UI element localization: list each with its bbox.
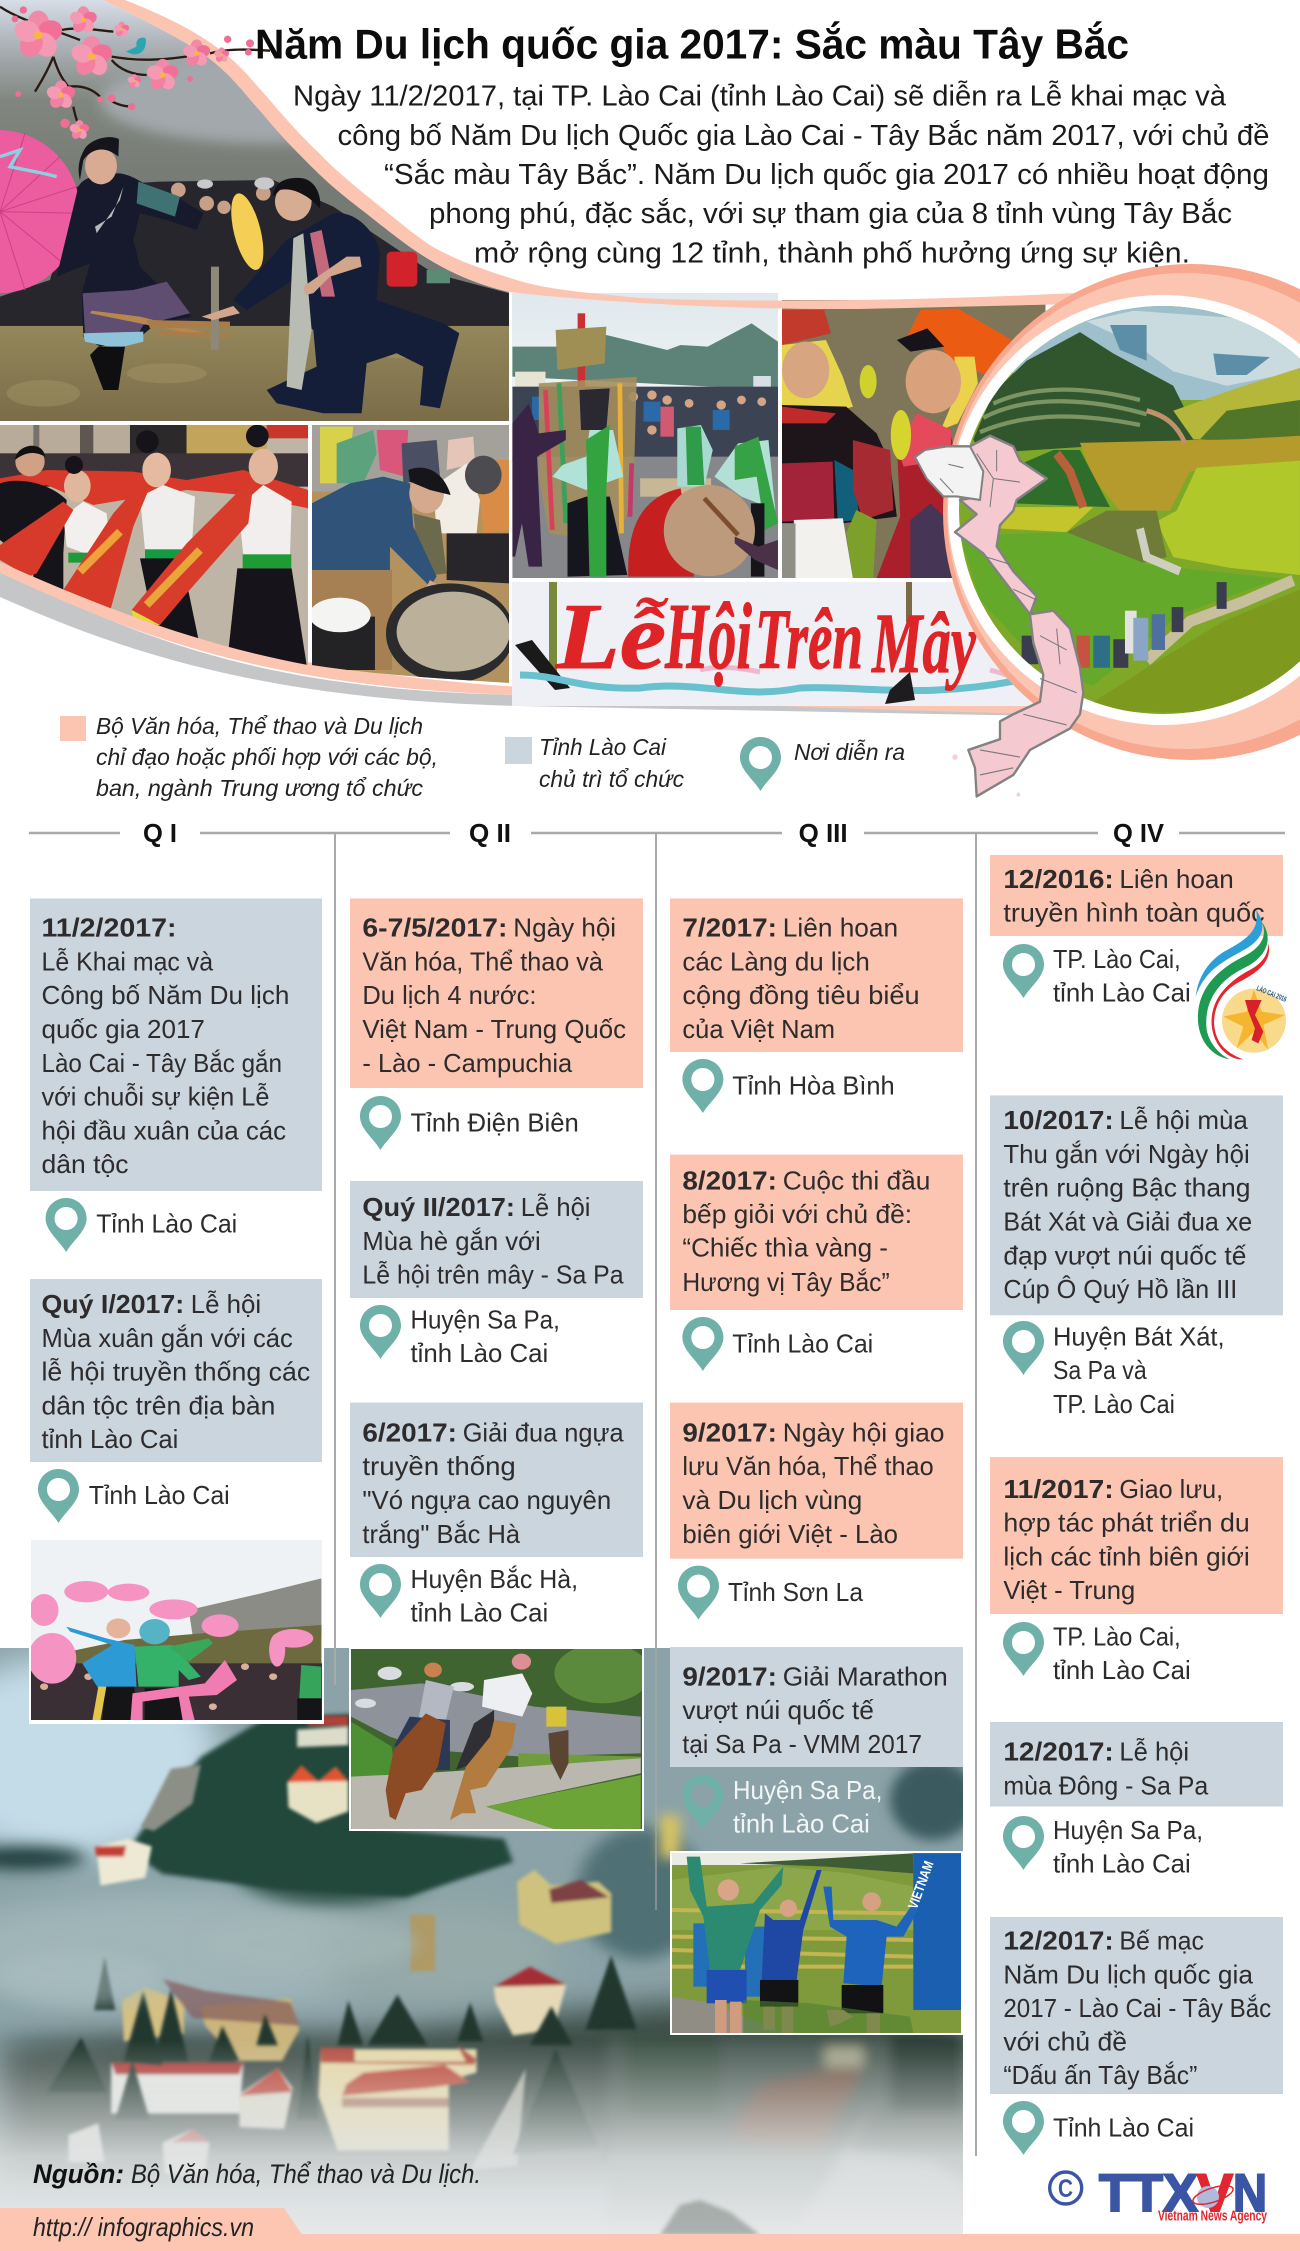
card: horse race [350, 1403, 643, 1557]
card: marathon: Giải Marathon [783, 1662, 948, 1692]
heading: Q I [143, 818, 177, 848]
circle photo frame rings [943, 264, 1300, 760]
location [360, 1564, 578, 1628]
card: television festival: Liên hoan [1119, 864, 1234, 894]
intro paragraph: “Sắc màu Tây Bắc”. Năm Du lịch quốc gia 2017 có nhiều hoạt động [384, 158, 1269, 191]
card: closing ceremony [990, 1917, 1283, 2094]
location [360, 1096, 579, 1150]
location: Tỉnh Hòa Bình [732, 1070, 895, 1100]
card: border cooperation: Việt - Trung [1003, 1575, 1135, 1605]
card: closing ceremony: 2017 - Lào Cai - Tây Bắc [1003, 1993, 1271, 2023]
card: autumn festival: Cúp Ô Quý Hồ lần III [1003, 1274, 1237, 1304]
card: border cooperation: lịch các tỉnh biên giới [1003, 1541, 1250, 1571]
card: cooking contest [670, 1155, 963, 1310]
location [38, 1469, 230, 1523]
card: horse race: 6/2017: [362, 1417, 457, 1447]
photo: two smiling Lo Lo women [782, 300, 1045, 580]
panel: Q I [30, 818, 322, 1523]
card: opening ceremony: hội đầu xuân của các [42, 1115, 286, 1145]
card: Vietnam-Laos border festival [670, 1403, 963, 1559]
card: Vietnam-Laos border festival: và Du lịch vùng [682, 1485, 862, 1515]
location: Tỉnh Sơn La [728, 1577, 864, 1607]
location: tỉnh Lào Cai [733, 1808, 870, 1838]
card: cooking contest: Hương vị Tây Bắc” [682, 1267, 890, 1297]
card: winter festival: Lễ hội [1119, 1736, 1189, 1766]
cherry blossom branch with bird [0, 6, 270, 141]
card: spring festival: Mùa xuân gắn với các [42, 1323, 293, 1353]
card: four nations festival [350, 898, 643, 1088]
hand-painted festival lettering [554, 597, 976, 691]
card: autumn festival: trên ruộng Bậc thang [1003, 1172, 1250, 1202]
legend item: province: chủ trì tổ chức [539, 766, 684, 792]
card: closing ceremony: “Dấu ấn Tây Bắc” [1003, 2060, 1197, 2090]
card: television festival [990, 855, 1283, 936]
location: Tỉnh Lào Cai [89, 1480, 230, 1510]
photo: cooking at the big wok [309, 420, 514, 687]
card: autumn festival [990, 1095, 1283, 1315]
card: spring festival: Quý I/2017: [42, 1289, 184, 1319]
card: winter festival: mùa Đông - Sa Pa [1003, 1770, 1209, 1800]
location: tỉnh Lào Cai [1053, 1848, 1191, 1878]
card: village tourism festival: Liên hoan [783, 913, 898, 943]
location: TP. Lào Cai, [1053, 944, 1181, 974]
card: television festival: truyền hình toàn quốc [1003, 897, 1265, 927]
card: summer festival: Mùa hè gắn với [362, 1226, 541, 1256]
legend item: province [505, 734, 684, 792]
card: opening ceremony: Công bố Năm Du lịch [42, 980, 289, 1010]
photo: Hmong dancers in the field [0, 0, 509, 423]
logo: Lào Cai 2016 television festival [1196, 910, 1288, 1059]
panel: Q IV [990, 818, 1288, 2155]
card: closing ceremony: Năm Du lịch quốc gia [1003, 1960, 1254, 1990]
card: Vietnam-Laos border festival: Ngày hội giao [783, 1417, 944, 1447]
footer bar [0, 2234, 1300, 2251]
card: summer festival: Lễ hội trên mây - Sa Pa [362, 1260, 624, 1290]
card: summer festival: Quý II/2017: [362, 1192, 515, 1222]
card: opening ceremony [30, 898, 322, 1191]
location [682, 1775, 882, 1838]
legend [60, 713, 905, 801]
card: autumn festival: Bát Xát và Giải đua xe [1003, 1207, 1252, 1237]
intro paragraph: công bố Năm Du lịch Quốc gia Lào Cai - Tây Bắc năm 2017, với chủ đề [338, 119, 1270, 152]
photo: marathon runners [670, 1851, 963, 2035]
location: tỉnh Lào Cai [1053, 978, 1191, 1008]
card: summer festival: Lễ hội [521, 1192, 590, 1222]
card: autumn festival: Lễ hội mùa [1119, 1105, 1248, 1135]
legend item: ministry: ban, ngành Trung ương tổ chức [96, 775, 423, 801]
card: cooking contest: “Chiếc thìa vàng - [682, 1233, 888, 1263]
card: opening ceremony: với chuỗi sự kiện Lễ [42, 1082, 270, 1112]
location [682, 1059, 895, 1113]
card: opening ceremony: quốc gia 2017 [42, 1014, 205, 1044]
logo: TTXVN [1050, 2164, 1267, 2225]
card: closing ceremony: với chủ đề [1003, 2027, 1127, 2057]
location [1003, 1815, 1203, 1878]
location: Huyện Bắc Hà, [410, 1564, 578, 1594]
location: Tỉnh Lào Cai [732, 1329, 873, 1359]
hand-painted festival lettering: Hội [664, 585, 752, 689]
legend item: venue [740, 737, 905, 791]
location: Tỉnh Lào Cai [1053, 2112, 1194, 2142]
photo: Sa Pa rice terraces in circle [947, 296, 1300, 725]
card: village tourism festival: 7/2017: [682, 913, 777, 943]
card: winter festival [990, 1722, 1283, 1806]
location [1003, 2101, 1194, 2155]
title: Năm Du lịch quốc gia 2017: Sắc màu Tây Bắc [255, 20, 1129, 68]
card: spring festival [30, 1279, 322, 1462]
card: horse race: Giải đua ngựa [463, 1417, 624, 1447]
decorative band: upper curve from top-left to the circle [103, 0, 1075, 309]
intro paragraph: Ngày 11/2/2017, tại TP. Lào Cai (tỉnh Lào Cai) sẽ diễn ra Lễ khai mạc và [293, 80, 1227, 112]
card: border cooperation: 11/2017: [1003, 1474, 1114, 1504]
card: opening ceremony: Lễ Khai mạc và [42, 946, 214, 976]
hand-painted festival lettering: Mây [871, 595, 977, 691]
location: Huyện Sa Pa, [410, 1305, 560, 1335]
card: four nations festival: - Lào - Campuchia [362, 1048, 573, 1078]
card: television festival: 12/2016: [1003, 864, 1114, 894]
location: tỉnh Lào Cai [410, 1338, 548, 1368]
photo: Lễ Hội Trên Mây calligraphy banner [512, 582, 1042, 706]
card: marathon [670, 1647, 963, 1767]
card: cooking contest: Cuộc thi đầu [783, 1165, 930, 1195]
card: village tourism festival: cộng đồng tiêu biểu [682, 980, 920, 1010]
copyright mark [1050, 2172, 1082, 2204]
card: spring festival: Lễ hội [191, 1289, 261, 1319]
card: spring festival: tỉnh Lào Cai [42, 1424, 178, 1454]
card: closing ceremony: 12/2017: [1003, 1926, 1114, 1956]
location [46, 1198, 237, 1252]
card: marathon: tại Sa Pa - VMM 2017 [682, 1729, 922, 1759]
panel: Q III [670, 818, 963, 1838]
card: four nations festival: Ngày hội [513, 913, 616, 943]
card: Vietnam-Laos border festival: lưu Văn hóa, Thể thao [682, 1451, 934, 1481]
photo: marathon runners: VIETNAM [904, 1859, 937, 1911]
card: village tourism festival: các Làng du lịch [682, 946, 870, 976]
photo: Thai ethnic dancers with red scarves [0, 420, 310, 677]
heading: Q III [799, 818, 848, 848]
card: border cooperation: hợp tác phát triển du [1003, 1508, 1250, 1538]
intro paragraph: phong phú, đặc sắc, với sự tham gia của 8 tỉnh vùng Tây Bắc [429, 197, 1232, 230]
location: TP. Lào Cai, [1053, 1622, 1181, 1652]
card: village tourism festival [670, 898, 963, 1052]
card: border cooperation: Giao lưu, [1119, 1474, 1223, 1504]
heading: Q IV [1113, 818, 1165, 848]
card: Vietnam-Laos border festival: 9/2017: [682, 1417, 777, 1447]
photo: Sa Pa in the mist [0, 1640, 977, 2244]
card: village tourism festival: của Việt Nam [682, 1014, 835, 1044]
card: cooking contest: 8/2017: [682, 1165, 777, 1195]
location: Sa Pa và [1053, 1355, 1147, 1385]
location: Huyện Sa Pa, [1053, 1815, 1203, 1845]
intro paragraph [293, 80, 1270, 270]
location [682, 1317, 873, 1371]
card: closing ceremony: Bế mạc [1119, 1926, 1204, 1956]
logo: TTXVN: V [1197, 2164, 1233, 2223]
card: opening ceremony: dân tộc [42, 1149, 128, 1179]
card: Vietnam-Laos border festival: biên giới Việt - Lào [682, 1519, 898, 1549]
card: spring festival: dân tộc trên địa bàn [42, 1390, 275, 1420]
location: tỉnh Lào Cai [1053, 1655, 1191, 1685]
logo: TTXVN: TTX [1099, 2164, 1198, 2223]
card: autumn festival: đạp vượt núi quốc tế [1003, 1240, 1247, 1270]
logo: TTXVN: N [1233, 2164, 1267, 2223]
card: four nations festival: 6-7/5/2017: [362, 913, 507, 943]
location: tỉnh Lào Cai [410, 1598, 548, 1628]
card: opening ceremony: Lào Cai - Tây Bắc gắn [42, 1048, 282, 1078]
location: Tỉnh Điện Biên [410, 1108, 579, 1138]
location: Huyện Bát Xát, [1053, 1321, 1225, 1351]
legend item: ministry [60, 713, 438, 801]
card: opening ceremony: 11/2/2017: [42, 913, 176, 943]
location [1003, 1321, 1225, 1419]
map of Vietnam with northwest region highlighted [915, 436, 1083, 797]
location: TP. Lào Cai [1053, 1389, 1175, 1419]
card: horse race: truyền thống [362, 1451, 516, 1481]
decorative band: lower curve under photos [0, 572, 1040, 716]
location [360, 1305, 560, 1368]
card: horse race: "Vó ngựa cao nguyên [362, 1485, 611, 1515]
card: marathon: 9/2017: [682, 1662, 777, 1692]
panel: Q II [350, 818, 643, 1628]
card: summer festival [350, 1181, 643, 1298]
card: four nations festival: Việt Nam - Trung Quốc [362, 1014, 626, 1044]
photo: Muong festival with drum [512, 290, 779, 580]
heading: Q II [469, 818, 511, 848]
hand-painted festival lettering: Trên [755, 591, 863, 687]
location: Huyện Sa Pa, [733, 1775, 882, 1805]
location: Tỉnh Lào Cai [96, 1209, 237, 1239]
intro paragraph: mở rộng cùng 12 tỉnh, thành phố hưởng ứng sự kiện. [474, 238, 1190, 270]
card: marathon: vượt núi quốc tế [682, 1695, 874, 1725]
legend item: ministry: Bộ Văn hóa, Thể thao và Du lịch [96, 713, 423, 739]
card: spring festival: lễ hội truyền thống các [42, 1357, 310, 1387]
photo: fan dance [28, 1537, 325, 1724]
copyright mark: C [1058, 2175, 1073, 2203]
card: cooking contest: bếp giỏi với chủ đề: [682, 1199, 912, 1229]
website tag [0, 2208, 303, 2251]
legend item: ministry: chỉ đạo hoặc phối hợp với các bộ, [96, 744, 438, 770]
card: border cooperation [990, 1457, 1283, 1614]
card: autumn festival: Thu gắn với Ngày hội [1003, 1139, 1250, 1169]
legend item: province: Tỉnh Lào Cai [539, 734, 667, 760]
source note: Nguồn: [33, 2159, 124, 2189]
website tag: http:// infographics.vn [33, 2212, 254, 2242]
card: horse race: trắng" Bắc Hà [362, 1519, 521, 1549]
card: four nations festival: Du lịch 4 nước: [362, 980, 536, 1010]
card: four nations festival: Văn hóa, Thể thao và [362, 946, 603, 976]
card: autumn festival: 10/2017: [1003, 1105, 1114, 1135]
legend item: venue: Nơi diễn ra [794, 738, 905, 765]
card: winter festival: 12/2017: [1003, 1736, 1114, 1766]
photo: horse race [349, 1643, 651, 1831]
hand-painted festival lettering: Lễ [555, 585, 669, 689]
location [1003, 1622, 1191, 1685]
location [1003, 944, 1191, 1008]
location [678, 1566, 864, 1620]
source note: Bộ Văn hóa, Thể thao và Du lịch. [131, 2159, 481, 2189]
